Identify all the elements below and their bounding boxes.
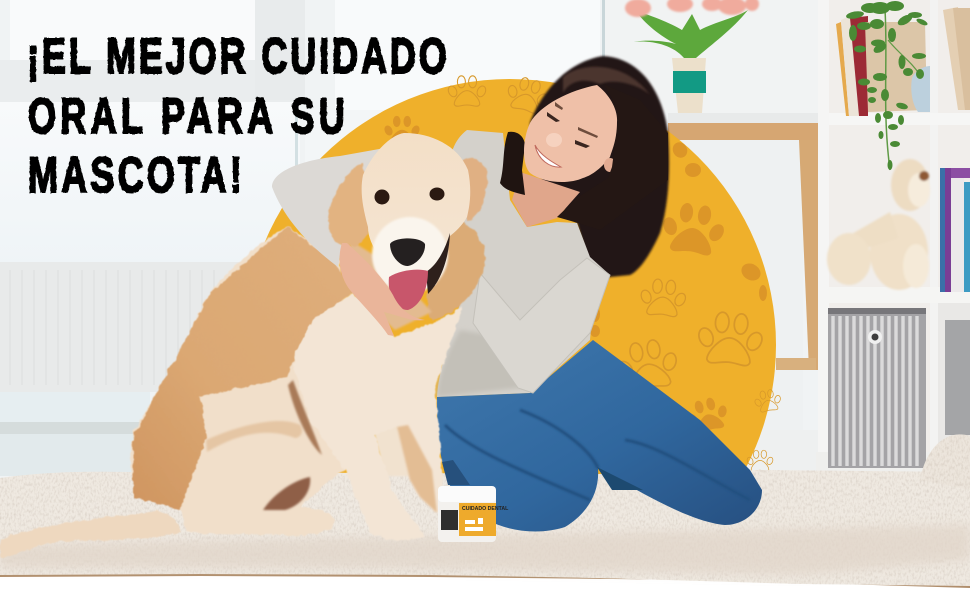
hind quarters base <box>131 227 345 535</box>
eyes <box>374 188 444 204</box>
hanging plant <box>846 1 928 170</box>
back hair <box>530 56 669 278</box>
paw prints <box>383 74 783 471</box>
left lock of hair <box>500 132 525 195</box>
woman <box>437 56 762 531</box>
title <box>27 29 447 203</box>
lower torso shading <box>437 330 545 397</box>
title: ¡EL MEJOR CUIDADO <box>27 29 447 84</box>
face <box>524 85 617 182</box>
muzzle <box>372 217 448 293</box>
nose <box>390 238 425 266</box>
room background <box>0 0 970 480</box>
sweater forearm <box>473 258 610 393</box>
woman's hand on dog <box>340 243 425 336</box>
neck <box>512 172 580 227</box>
eyes and brows <box>547 102 598 148</box>
jar label text: CUIDADO DENTAL <box>462 506 509 512</box>
bookshelf <box>816 0 970 479</box>
rug corner <box>920 434 970 490</box>
carpet pile <box>0 470 970 586</box>
product jar <box>438 486 509 542</box>
dog <box>0 133 488 558</box>
carpet shading <box>0 525 970 575</box>
title: ORAL PARA SU <box>28 89 345 144</box>
head <box>362 133 470 296</box>
hair highlight <box>563 67 650 95</box>
tan back <box>133 227 353 510</box>
nose <box>546 133 562 147</box>
jeans <box>437 340 762 531</box>
ear <box>604 158 616 172</box>
tail <box>0 511 181 558</box>
shoe <box>597 467 643 490</box>
sweater torso <box>437 130 610 397</box>
smile <box>535 145 561 167</box>
mouth line <box>426 233 450 294</box>
title: MASCOTA! <box>28 148 242 203</box>
back leg feathering <box>397 425 437 513</box>
orange circle with paw prints <box>264 75 781 474</box>
sleeve around dog <box>272 148 385 267</box>
tan ruff <box>427 215 485 320</box>
books on lower shelf <box>940 168 970 292</box>
crease shadow <box>288 380 322 455</box>
jeans creases <box>445 410 750 500</box>
carpet <box>0 434 970 588</box>
striped storage box <box>828 308 970 468</box>
gap between legs <box>315 420 415 476</box>
side table <box>668 113 820 370</box>
dark patch <box>263 477 310 510</box>
tongue <box>389 270 428 310</box>
haunch band <box>206 421 302 452</box>
vase with tulips <box>625 0 759 113</box>
teddy bear <box>827 159 930 290</box>
front legs and chest <box>293 293 463 541</box>
neck fur <box>350 240 432 330</box>
front hair over face <box>557 84 668 230</box>
left ear <box>328 163 370 247</box>
window radiator <box>10 270 214 385</box>
right ear <box>462 159 488 222</box>
brown carpet edge <box>0 573 970 588</box>
